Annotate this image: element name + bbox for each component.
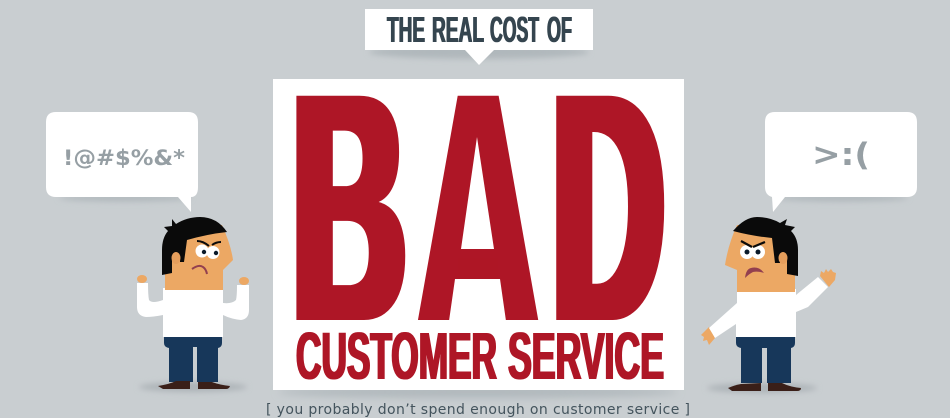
headline CUSTOMER SERVICE: CUSTOMER	[296, 319, 497, 394]
subtitle: [ you probably don’t spend enough on customer service ]	[266, 402, 690, 418]
title text: COST	[490, 9, 539, 50]
left character	[137, 217, 249, 392]
left character shoes	[158, 381, 230, 389]
left character legs	[164, 337, 222, 382]
headline BAD: D	[553, 24, 664, 389]
right character eyes	[740, 241, 765, 259]
bubble text: symbols: !@#$%&*	[63, 146, 185, 170]
headline BAD: B	[293, 26, 405, 390]
bubble text: angry face: >:(	[812, 137, 870, 173]
title banner	[365, 9, 593, 65]
right character hair	[733, 217, 798, 276]
left character mouth	[192, 266, 207, 274]
title text	[387, 9, 572, 50]
left character ear	[172, 252, 180, 264]
left character hands	[137, 275, 249, 285]
right character head	[725, 217, 798, 292]
main white panel	[273, 24, 684, 398]
left character eyes	[196, 241, 221, 259]
headline CUSTOMER SERVICE: SERVICE	[508, 319, 664, 394]
left character hair	[162, 217, 227, 275]
headline BAD	[293, 24, 664, 390]
left character shirt	[137, 283, 249, 337]
right character shoes	[728, 383, 801, 391]
right character mouth	[745, 268, 764, 278]
right speech bubble	[765, 112, 917, 212]
title text: REAL	[432, 9, 484, 50]
right character	[701, 217, 836, 393]
headline BAD: A	[421, 26, 535, 390]
title text: OF	[547, 9, 572, 50]
right character hands	[701, 269, 836, 345]
left character head	[162, 217, 233, 290]
right character ear	[778, 252, 788, 264]
left speech bubble	[46, 112, 198, 212]
right character shirt	[709, 277, 828, 338]
right character legs	[736, 337, 795, 383]
title text: THE	[387, 9, 425, 50]
